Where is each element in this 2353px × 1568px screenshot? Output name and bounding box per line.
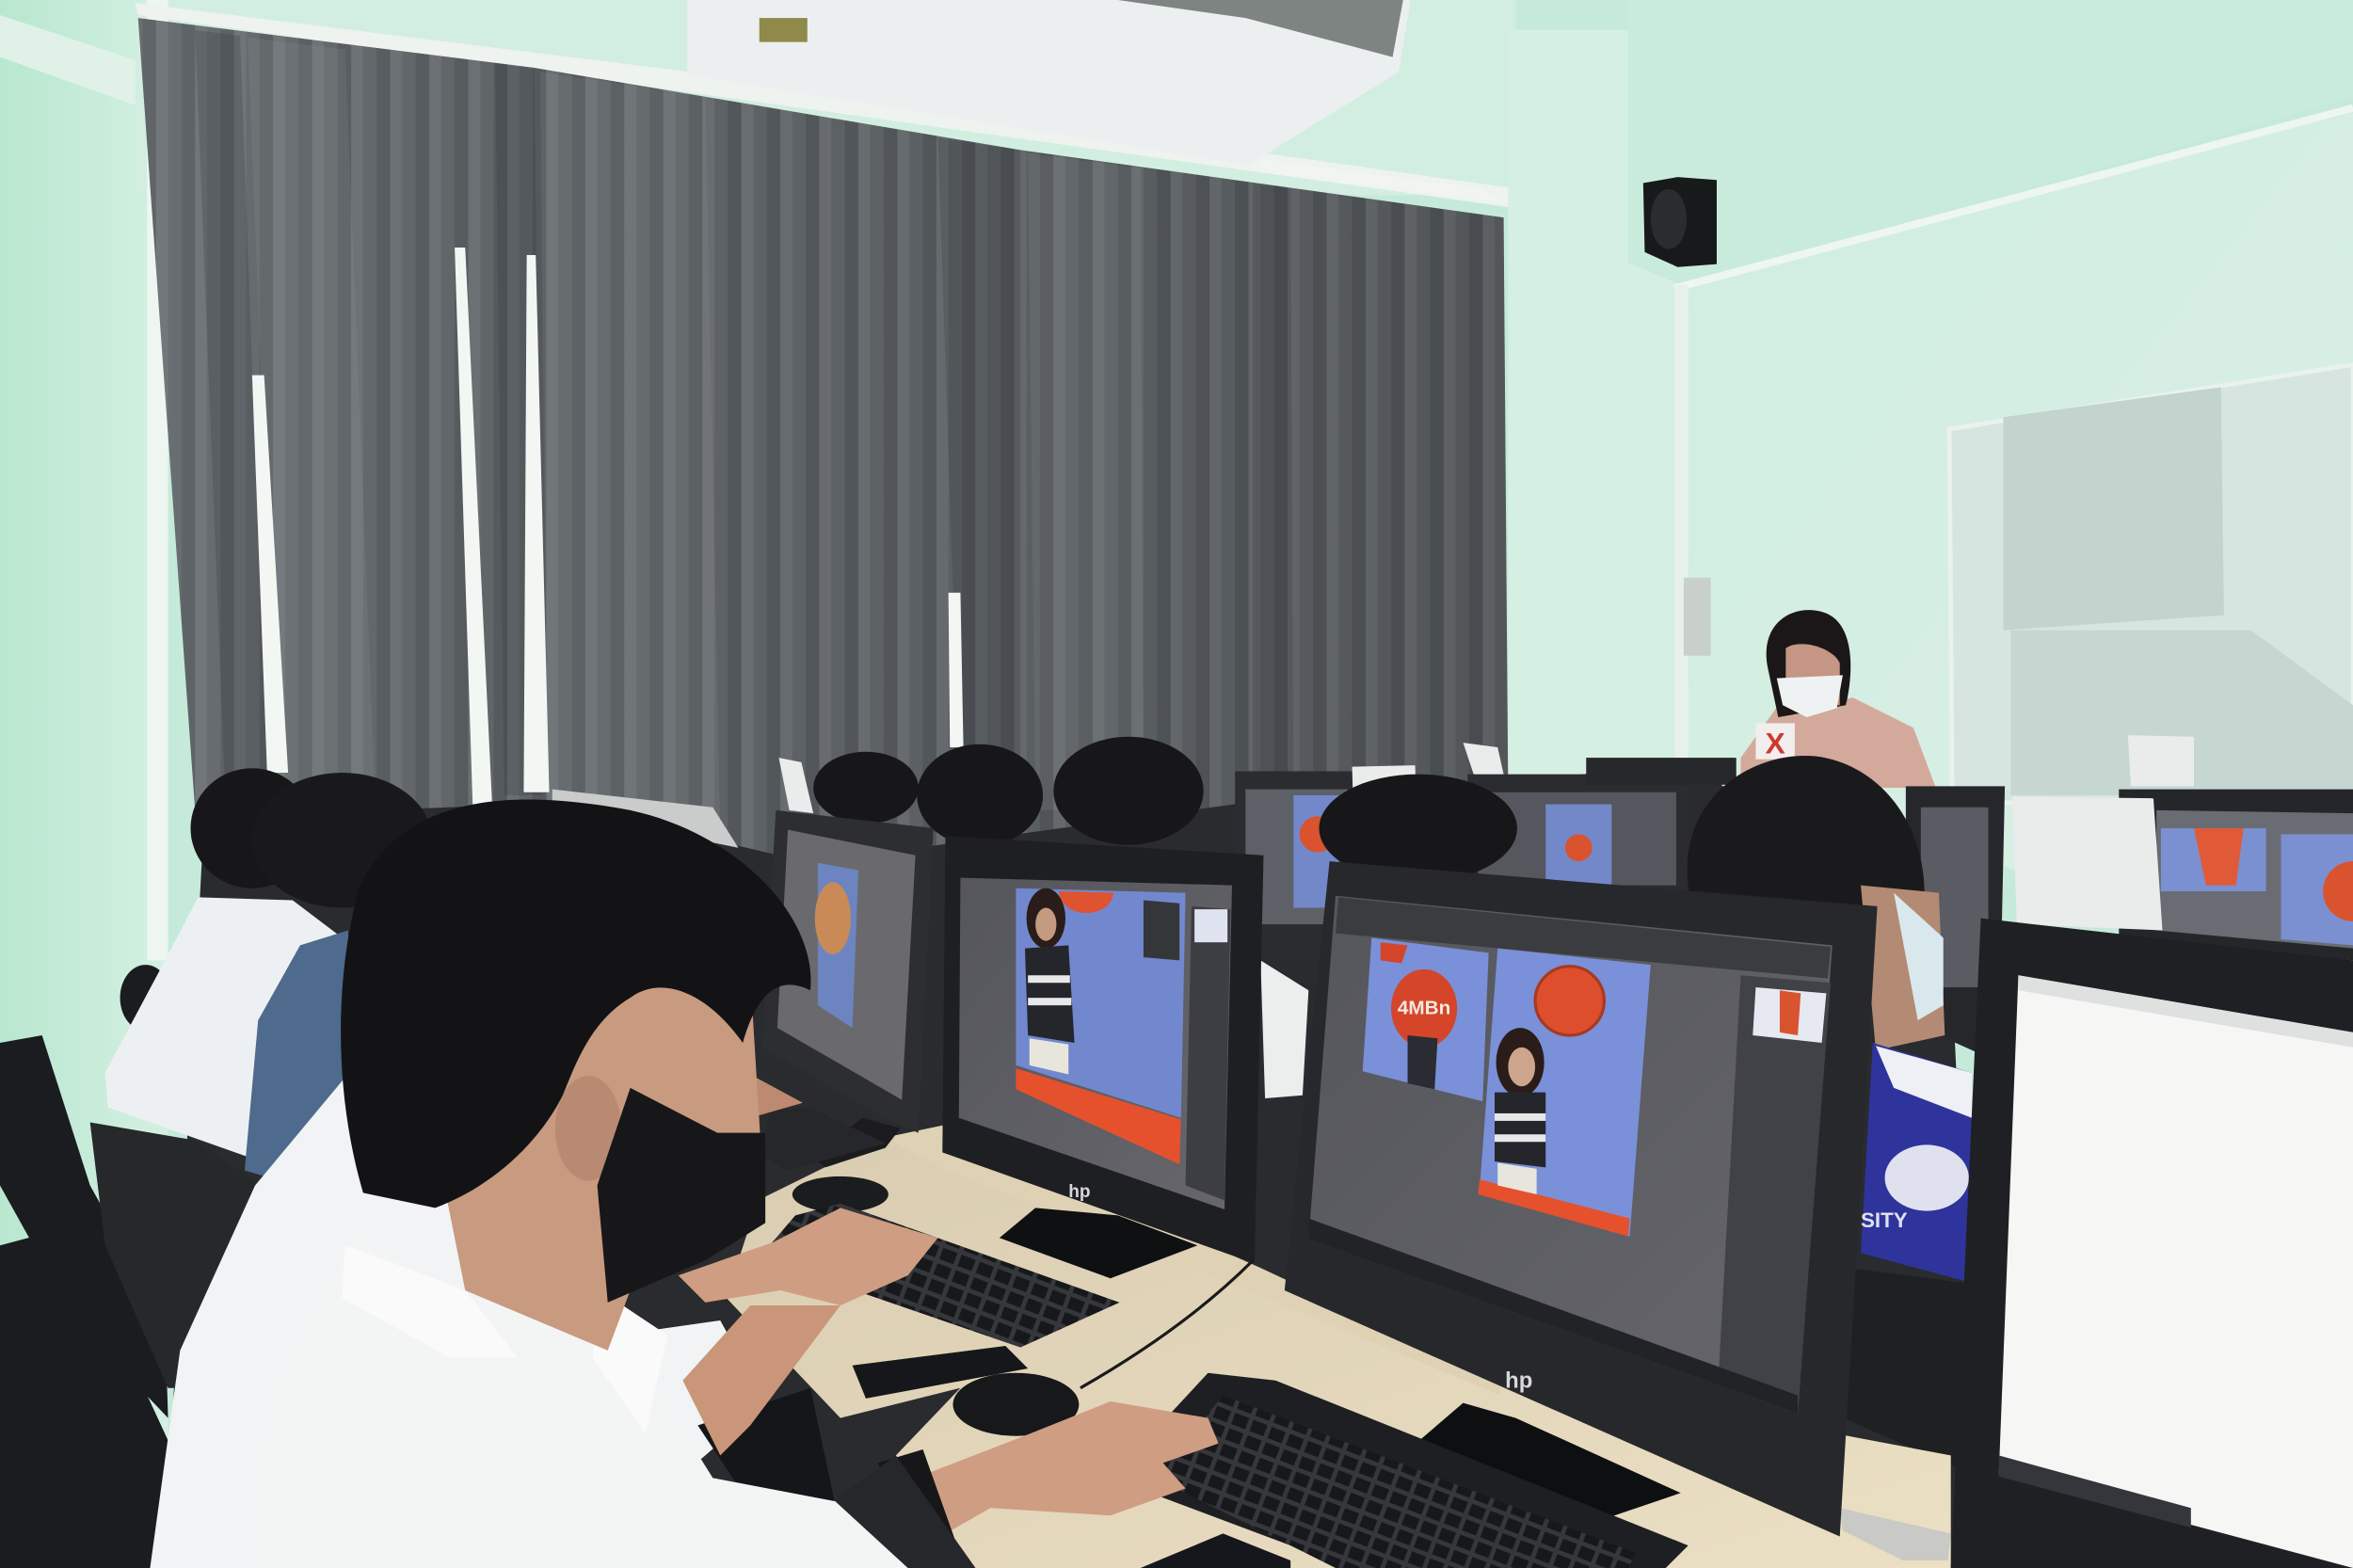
woman on screen <box>1025 888 1075 1074</box>
mouse rear <box>792 1176 888 1212</box>
hand on keyboard <box>679 1208 937 1305</box>
keyboard rear <box>765 1108 886 1171</box>
red x sign <box>1755 723 1795 760</box>
student far left in white shirt <box>105 768 343 1159</box>
hair <box>341 799 810 1208</box>
wrist watch <box>878 1449 954 1560</box>
chair backs at left <box>0 965 263 1568</box>
teacher <box>1740 610 1936 788</box>
forearm and hand on keyboard <box>916 1401 1219 1538</box>
monitor: middle <box>942 836 1263 1278</box>
wall speaker <box>1643 177 1717 267</box>
vertical blinds curtain <box>138 18 1508 871</box>
phone on desk <box>853 1346 1028 1399</box>
keyboard front <box>1111 1373 1689 1568</box>
window light gaps <box>252 248 964 806</box>
design thumbnail on screen: 4MBn <box>1398 998 1450 1019</box>
neck and face <box>435 968 762 1351</box>
dark area behind desks <box>168 765 1981 1568</box>
design thumbnail on screen <box>1363 937 1489 1101</box>
student two in white shirt <box>150 1073 937 1568</box>
face mask <box>598 1088 765 1303</box>
back row monitors <box>1235 758 2353 1063</box>
back row students <box>813 737 1517 882</box>
monitor: front large <box>1285 861 1878 1537</box>
wall switch box <box>1684 578 1711 656</box>
monitor: front large: hp <box>1505 1368 1532 1394</box>
phone at bottom <box>1141 1533 1290 1568</box>
mouse front <box>952 1373 1079 1436</box>
paper name cards on monitors <box>552 735 2194 930</box>
dark gap under desk at bottom <box>834 1455 975 1568</box>
keyboard middle <box>760 1204 1119 1348</box>
design artboard on screen <box>1478 949 1651 1237</box>
red x sign: X <box>1766 726 1785 760</box>
shirt <box>258 1238 908 1568</box>
air conditioner <box>687 0 1504 202</box>
main student in foreground <box>258 799 1219 1568</box>
monitor cable <box>1080 1260 1253 1388</box>
monitor: right foreground, web page <box>1951 919 2353 1568</box>
student at right wearing blue shirt: SITY <box>1861 1208 1908 1232</box>
monitor: middle: hp <box>1068 1182 1091 1202</box>
desks <box>727 1126 1951 1568</box>
student at right wearing blue shirt <box>1688 756 1972 1470</box>
whiteboard <box>1949 364 2353 803</box>
student in denim jacket <box>245 773 432 1177</box>
white shirt between middle monitors <box>1260 960 1308 1098</box>
monitor: rear left <box>762 810 934 1171</box>
